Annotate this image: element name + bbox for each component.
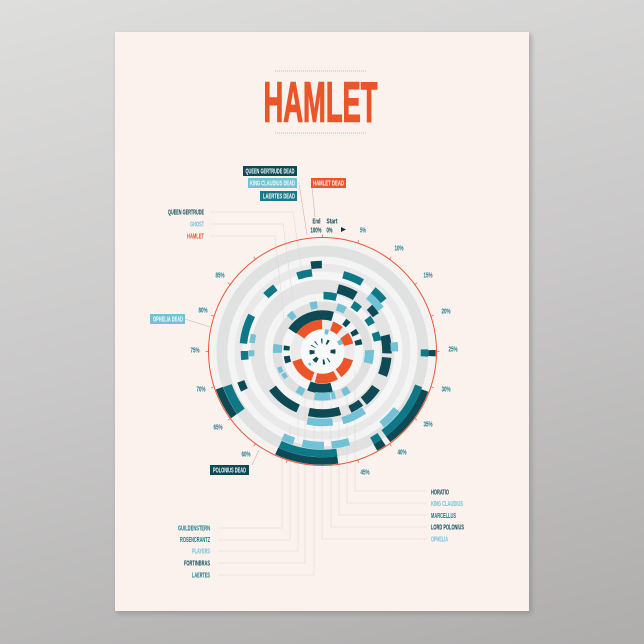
tag: Polonius dead <box>210 465 249 475</box>
teal segments <box>220 250 424 454</box>
start label: Start <box>326 218 338 226</box>
character labels bottom left <box>178 526 210 580</box>
15 percent: 15% <box>424 272 433 280</box>
percent labels <box>190 218 458 476</box>
35 percent: 35% <box>424 422 433 428</box>
end percent: 100% <box>310 228 322 234</box>
tag: King Claudius dead: KING CLAUDIUS DEAD <box>250 181 295 188</box>
40 percent: 40% <box>398 450 407 456</box>
character labels bottom right <box>431 490 464 544</box>
poster sheet <box>115 32 529 611</box>
title bottom dotted rule <box>275 132 366 134</box>
5 percent: 5% <box>360 228 366 234</box>
radial chart segments <box>213 242 432 461</box>
label: Guildenstern: GUILDENSTERN <box>178 526 210 532</box>
end label: End <box>312 218 320 226</box>
tag: Ophelia dead: OPHELIA DEAD <box>153 317 183 324</box>
character leader lines <box>210 212 427 575</box>
poster shadow <box>116 34 532 614</box>
death tag leader lines <box>185 183 315 465</box>
label: Rosencrantz: ROSENCRANTZ <box>180 537 210 544</box>
25 percent: 25% <box>448 346 458 354</box>
80 percent: 80% <box>198 308 208 314</box>
75 percent: 75% <box>190 348 200 354</box>
label: Horatio: HORATIO <box>431 490 449 496</box>
character labels top left <box>168 210 204 240</box>
tag: Polonius dead: POLONIUS DEAD <box>213 468 246 475</box>
centre tick marks <box>312 341 333 362</box>
radial chart background rings <box>210 238 436 464</box>
label: Marcellus: MARCELLUS <box>431 513 456 520</box>
tag: Hamlet dead: HAMLET DEAD <box>313 181 344 188</box>
label: Ghost: GHOST <box>190 222 204 228</box>
label: Ophelia: OPHELIA <box>431 536 448 544</box>
label: Laertes: LAERTES <box>192 572 210 580</box>
red outer circle <box>208 238 436 466</box>
60 percent: 60% <box>242 452 251 458</box>
tag: Laertes dead <box>260 191 297 201</box>
45 percent: 45% <box>360 470 370 476</box>
orange segments <box>296 324 350 378</box>
85 percent: 85% <box>216 272 225 280</box>
light blue segments <box>228 258 416 446</box>
label: Players: PLAYERS <box>192 548 210 556</box>
70 percent: 70% <box>196 386 206 394</box>
text: HAMLET <box>264 70 378 134</box>
start percent: 0% <box>326 228 333 234</box>
tag: Hamlet dead <box>311 178 346 188</box>
label: Lord Polonius: LORD POLONIUS <box>431 524 464 532</box>
circle percent ticks <box>206 234 440 463</box>
tag: King Claudius dead <box>248 178 297 188</box>
10 percent: 10% <box>394 246 404 252</box>
dark segments <box>213 242 432 461</box>
30 percent: 30% <box>442 386 451 394</box>
label: Fortinbras: FORTINBRAS <box>184 560 210 568</box>
title top dotted rule <box>275 70 366 72</box>
20 percent: 20% <box>442 308 451 316</box>
65 percent: 65% <box>214 424 223 432</box>
title block <box>264 70 378 134</box>
tag: Queen Gertrude dead <box>243 166 297 176</box>
label: Hamlet: HAMLET <box>187 234 204 240</box>
direction arrow <box>341 227 346 232</box>
tag: Laertes dead: LAERTES DEAD <box>263 194 295 201</box>
tag: Queen Gertrude dead: QUEEN GERTRUDE DEAD <box>246 169 294 176</box>
tag: Ophelia dead <box>150 314 185 324</box>
label: King Claudius: KING CLAUDIUS <box>431 501 463 508</box>
label: Queen Gertrude: QUEEN GERTRUDE <box>168 210 204 216</box>
